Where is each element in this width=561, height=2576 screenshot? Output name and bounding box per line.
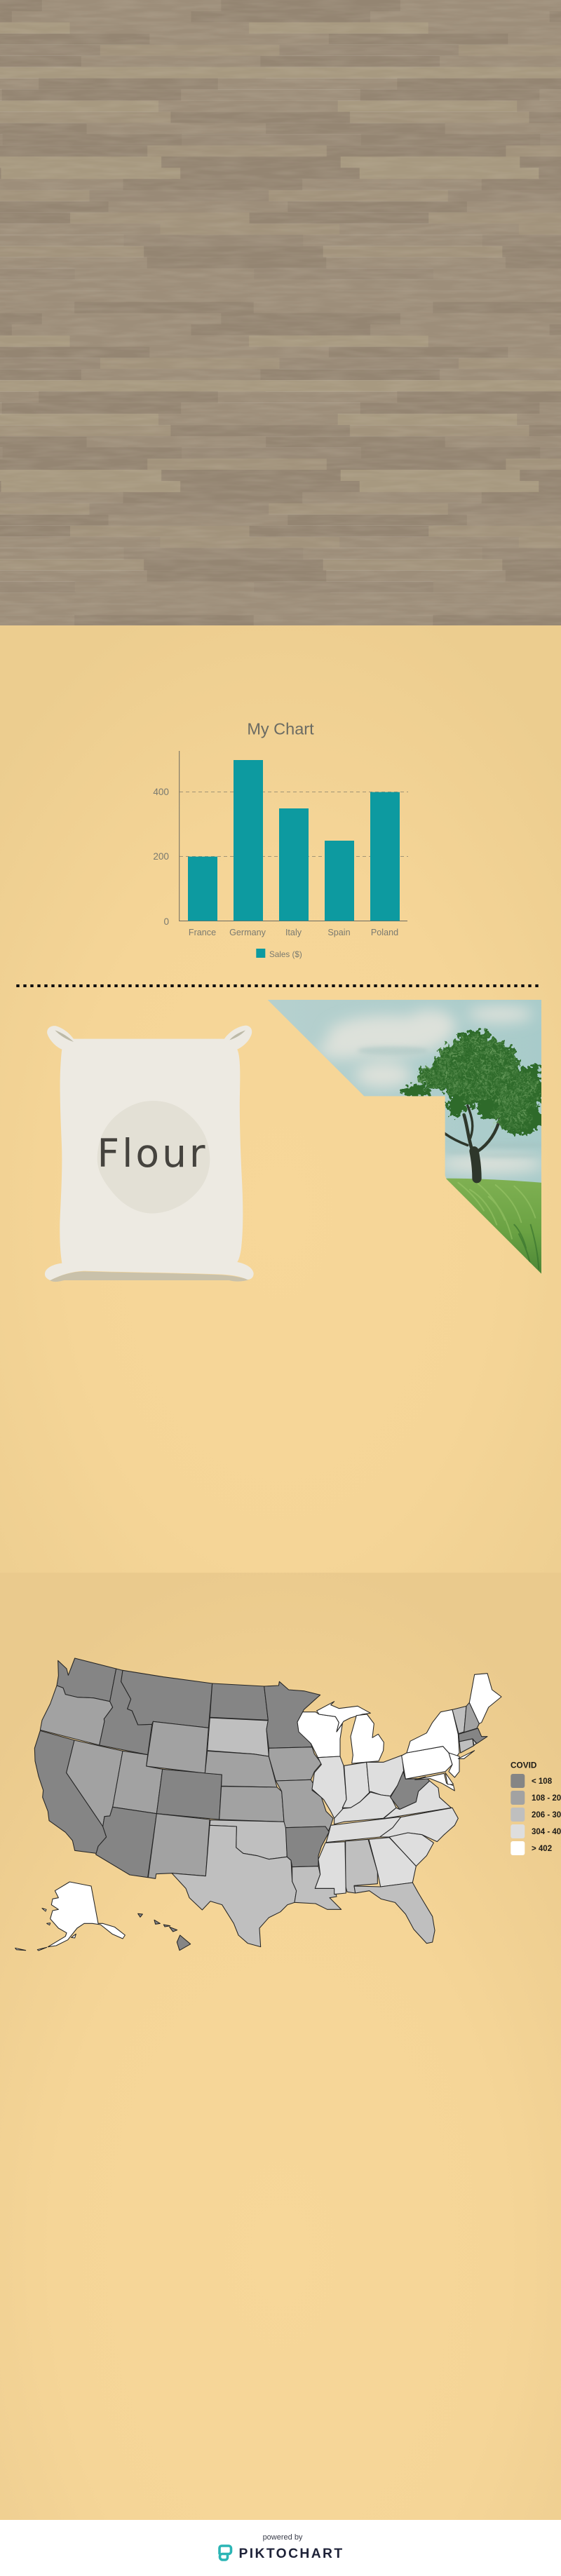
piktochart wordmark: PIKTOCHART [238,2547,344,2561]
legend row: over 402 [511,1841,552,1855]
sack ear folds [55,1030,245,1042]
midwest and great lakes states [297,1702,404,1824]
chart legend [256,949,302,959]
legend row: 304-401 [511,1824,561,1838]
choropleth map of the USA [15,1658,502,1951]
flour label text: Flour [97,1131,208,1176]
sky [266,996,547,1183]
category labels [189,928,398,937]
chart title: My Chart [247,719,314,738]
category labels: France [189,928,216,937]
tree trunk and branches [444,1106,500,1179]
sand background upper section [0,625,561,1573]
map legend: COVID [511,1760,561,1855]
photo: tree in field, cropped to angular shape [268,1000,541,1273]
dotted divider [16,984,539,987]
grass field [444,1179,547,1276]
wood floor header [0,0,561,625]
sand background lower section [0,1573,561,2520]
legend row: under 108 [511,1774,553,1788]
sack label blob [97,1101,210,1214]
tree crown [401,1031,545,1134]
piktochart logo icon [219,2546,231,2560]
y axis labels: 200 [153,851,169,862]
category labels: Germany [229,928,266,937]
southern states [315,1772,458,1944]
chart legend: Sales ($) [269,950,302,959]
northeastern states [402,1674,501,1791]
bars [188,760,400,921]
category labels: Italy [285,928,302,937]
powered by text: powered by [263,2533,303,2542]
flour sack illustration [45,1025,254,1282]
gridlines and axes [180,751,408,921]
legend title: COVID [511,1760,537,1770]
legend row: 206-303 [511,1808,561,1822]
sack shadow [50,1271,249,1282]
footer: powered by Piktochart [218,2533,344,2561]
hawaii [138,1913,191,1951]
y axis labels: 0 [163,916,169,927]
bar chart: My Chart [153,719,408,959]
legend row: over 402: > 402 [532,1845,552,1853]
category labels: Spain [327,928,351,937]
legend row: under 108: < 108 [532,1777,553,1786]
sack body [45,1026,254,1280]
y axis labels [153,787,169,927]
y axis labels: 400 [153,787,169,797]
western states [34,1658,222,1878]
category labels: Poland [371,928,398,937]
alaska [15,1882,125,1951]
plains states [172,1681,342,1947]
legend row: 108-205 [511,1791,561,1805]
